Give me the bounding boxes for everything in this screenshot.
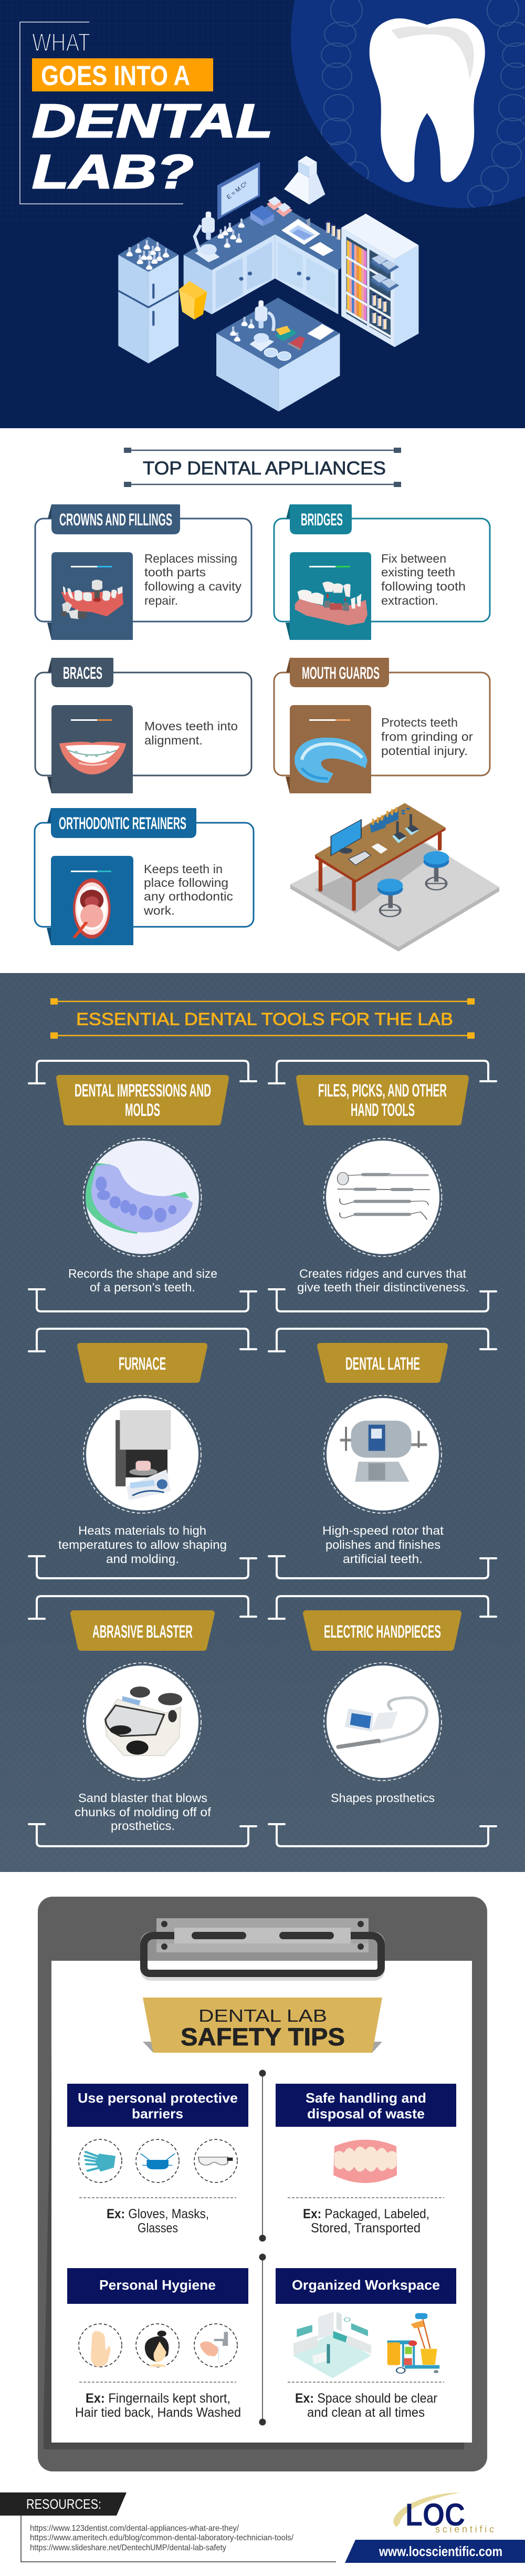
- panel: personal protective barriers: Glasses: [138, 2221, 178, 2236]
- panel: dental impressions and molds: MOLDS: [125, 1100, 160, 1120]
- panel: bridges: following tooth: [381, 580, 466, 593]
- bookshelf: [341, 214, 418, 347]
- sink: [281, 218, 320, 245]
- photo: handpiece: [338, 1698, 427, 1747]
- panel: bridges: existing teeth: [381, 565, 455, 579]
- refrigerator: [118, 237, 178, 364]
- icon: gloves: [85, 2152, 116, 2171]
- panel: abrasive blaster: ABRASIVE BLASTER: [92, 1622, 193, 1642]
- icon: hand washing: [200, 2332, 228, 2361]
- panel: personal protective barriers: Use personal protective: [78, 2090, 238, 2106]
- panel: orthodontic retainers: any orthodontic: [144, 889, 233, 903]
- icon: open mouth: [73, 878, 111, 939]
- title block: LAB?: [32, 146, 194, 199]
- photo: sand blaster: [104, 1687, 182, 1755]
- icon: crowns: [61, 580, 123, 619]
- panel: mouth guards: MOUTH GUARDS: [302, 664, 380, 682]
- banner: dental lab safety tips: SAFETY TIPS: [181, 2023, 345, 2051]
- panel: personal hygiene: [67, 2268, 248, 2420]
- panel: personal hygiene: Hair tied back, Hands Washed: [75, 2405, 241, 2420]
- panel: mouth guards: potential injury.: [381, 744, 468, 758]
- panel: safe handling and disposal: disposal of waste: [307, 2106, 425, 2122]
- section: essential dental tools: [0, 973, 525, 1872]
- panel: files, picks, and other hand tools: Creates ridges and curves that: [299, 1267, 467, 1280]
- icon: goggles: [198, 2157, 233, 2165]
- photo: dental impression: [84, 1141, 199, 1254]
- panel: mouth guards: [274, 658, 490, 793]
- footer: resources: https://www.123dentist.com/dental-appliances-what-are-they/: [30, 2524, 239, 2533]
- keyboard and paper: [349, 851, 371, 865]
- monitor: [331, 820, 361, 855]
- panel: dental lathe: artificial teeth.: [343, 1552, 423, 1566]
- panel: braces: BRACES: [63, 664, 102, 682]
- header section background: [0, 0, 525, 428]
- open book: [309, 242, 334, 256]
- photo: furnace: [116, 1410, 171, 1500]
- icon: smile with braces: [59, 742, 126, 774]
- icon: mouth guard: [295, 738, 368, 783]
- panel: furnace: Heats materials to high: [78, 1524, 206, 1537]
- panel: mouth guards: from grinding or: [381, 730, 473, 743]
- illustration: isometric workbench: [290, 803, 499, 951]
- panel: dental impressions and molds: [59, 1078, 226, 1294]
- panel: dental lathe: polishes and finishes: [326, 1538, 440, 1551]
- panel: orthodontic retainers: work.: [143, 904, 175, 917]
- panel: abrasive blaster: prosthetics.: [111, 1819, 175, 1833]
- panel: personal protective barriers: barriers: [132, 2106, 183, 2122]
- panel: crowns and fillings: repair.: [144, 594, 178, 607]
- panel: electric handpieces: [306, 1613, 458, 1805]
- photo: lathe: [340, 1421, 427, 1482]
- title block: WHAT: [32, 29, 90, 57]
- icon: hand: [91, 2331, 110, 2367]
- panel: dental lathe: [320, 1346, 445, 1566]
- panel: organized workspace: and clean at all times: [307, 2405, 425, 2420]
- icon: hair tied back: [145, 2331, 169, 2367]
- panel: bridges: [274, 504, 490, 640]
- heading: top dental appliances: TOP DENTAL APPLIANCES: [143, 458, 386, 479]
- panel: dental impressions and molds: of a person’s teeth.: [90, 1280, 195, 1294]
- panel: mouth guards: Protects teeth: [381, 716, 458, 729]
- panel: braces: Moves teeth into: [144, 719, 238, 733]
- panel: furnace: [58, 1346, 227, 1566]
- board: [217, 162, 260, 220]
- title block: [20, 22, 273, 204]
- panel: abrasive blaster: chunks of molding off of: [75, 1805, 212, 1819]
- icon: mask: [141, 2154, 175, 2169]
- footer: resources: [0, 2492, 336, 2562]
- panel: bridges: extraction.: [381, 594, 438, 607]
- photo: hand tools: [338, 1172, 429, 1219]
- panel: abrasive blaster: [74, 1613, 212, 1833]
- website banner: www.locscientific.com: [379, 2543, 502, 2559]
- tube racks: [250, 196, 292, 226]
- panel: bridges: BRIDGES: [301, 510, 343, 529]
- logo: LOC scientific: scientific: [435, 2524, 494, 2534]
- panel: organized workspace: Organized Workspace: [292, 2277, 440, 2293]
- panel: electric handpieces: Shapes prosthetics: [331, 1791, 435, 1805]
- panel: furnace: temperatures to allow shaping: [58, 1538, 227, 1551]
- isometric lab illustration: [118, 156, 418, 411]
- website banner: [345, 2540, 525, 2563]
- yellow bin: [179, 281, 207, 319]
- panel: safe handling and disposal: Stored, Transported: [311, 2221, 421, 2236]
- panel: safe handling and disposal: Safe handling and: [306, 2090, 426, 2106]
- panel: orthodontic retainers: Keeps teeth in: [144, 862, 223, 876]
- panel: dental impressions and molds: Records the shape and size: [68, 1267, 217, 1280]
- panel: crowns and fillings: [35, 504, 251, 640]
- panel: braces: alignment.: [144, 733, 203, 747]
- microscope: [195, 212, 220, 262]
- panel: crowns and fillings: Replaces missing: [144, 552, 237, 565]
- panel: safe handling and disposal: [276, 2084, 456, 2236]
- logo: LOC scientific: [393, 2492, 494, 2534]
- icon: dentures: [333, 2139, 397, 2183]
- section: top dental appliances: [0, 428, 525, 973]
- stool far: [424, 851, 449, 890]
- icon: large white tooth: [370, 18, 485, 182]
- note paper: [371, 843, 387, 854]
- panel: orthodontic retainers: place following: [144, 876, 228, 889]
- panel: furnace: FURNACE: [119, 1354, 166, 1374]
- heading: essential tools: ESSENTIAL DENTAL TOOLS FOR THE LAB: [76, 1009, 453, 1029]
- panel: crowns and fillings: tooth parts: [144, 565, 206, 579]
- panel: crowns and fillings: following a cavity: [144, 580, 242, 593]
- panel: dental lathe: High-speed rotor that: [322, 1524, 444, 1537]
- footer: resources: RESOURCES:: [26, 2496, 101, 2512]
- island bench: [216, 298, 340, 411]
- panel: orthodontic retainers: ORTHODONTIC RETAINERS: [59, 814, 186, 833]
- banner: dental lab safety tips: DENTAL LAB: [198, 2006, 327, 2025]
- panel: files, picks, and other hand tools: give teeth their distinctiveness.: [297, 1280, 469, 1294]
- logo: LOC scientific: LOC: [405, 2497, 465, 2532]
- icon: clip: [140, 1918, 385, 1981]
- panel: files, picks, and other hand tools: [297, 1078, 469, 1294]
- stool near: [377, 878, 403, 917]
- panel: files, picks, and other hand tools: HAND TOOLS: [351, 1100, 415, 1120]
- L-shaped cabinet: [184, 202, 342, 314]
- title block: GOES INTO A: [41, 60, 190, 91]
- heading: top dental appliances: [124, 448, 401, 487]
- icon: dental bridge: [295, 582, 368, 625]
- tooth circle backdrop with teeth outlines: [291, 0, 525, 209]
- vent hood: [284, 156, 325, 204]
- panel: safe handling and disposal: Ex: Packaged, Labeled,: [303, 2207, 429, 2221]
- heading: essential tools: [50, 998, 475, 1039]
- panel: organized workspace: Ex: Space should be clear: [295, 2391, 437, 2406]
- panel: furnace: and molding.: [106, 1552, 179, 1566]
- panel: personal protective barriers: Ex: Gloves, Masks,: [107, 2207, 209, 2221]
- section: safety tips clipboard: [0, 1872, 525, 2576]
- instruments on table: [370, 808, 419, 843]
- panel: dental lathe: DENTAL LATHE: [345, 1354, 420, 1374]
- footer: resources: https://www.ameritech.edu/blog/common-dental-laboratory-technician-tools/: [30, 2533, 294, 2542]
- panel: dental impressions and molds: DENTAL IMPRESSIONS AND: [75, 1081, 211, 1101]
- footer: resources: https://www.slideshare.net/DentechUMP/dental-lab-safety: [30, 2543, 226, 2552]
- bottles: [326, 221, 341, 240]
- board: E = M.C²: [225, 181, 249, 200]
- panel: bridges: Fix between: [381, 552, 446, 565]
- icon: cleaning cart: [387, 2313, 439, 2373]
- panel: personal protective barriers: [67, 2084, 248, 2236]
- panel: orthodontic retainers: [35, 808, 254, 945]
- title block: DENTAL: [32, 95, 273, 148]
- panel: braces: [35, 658, 251, 793]
- panel: personal hygiene: Ex: Fingernails kept short,: [86, 2391, 230, 2406]
- banner: dental lab safety tips: [143, 1998, 382, 2053]
- panel: crowns and fillings: CROWNS AND FILLINGS: [59, 510, 172, 529]
- panel: personal hygiene: Personal Hygiene: [99, 2277, 216, 2293]
- panel: organized workspace: [276, 2268, 456, 2420]
- panel: abrasive blaster: Sand blaster that blows: [78, 1791, 207, 1805]
- flasks on counter: [217, 219, 245, 247]
- icon: isometric workspace: [293, 2312, 371, 2378]
